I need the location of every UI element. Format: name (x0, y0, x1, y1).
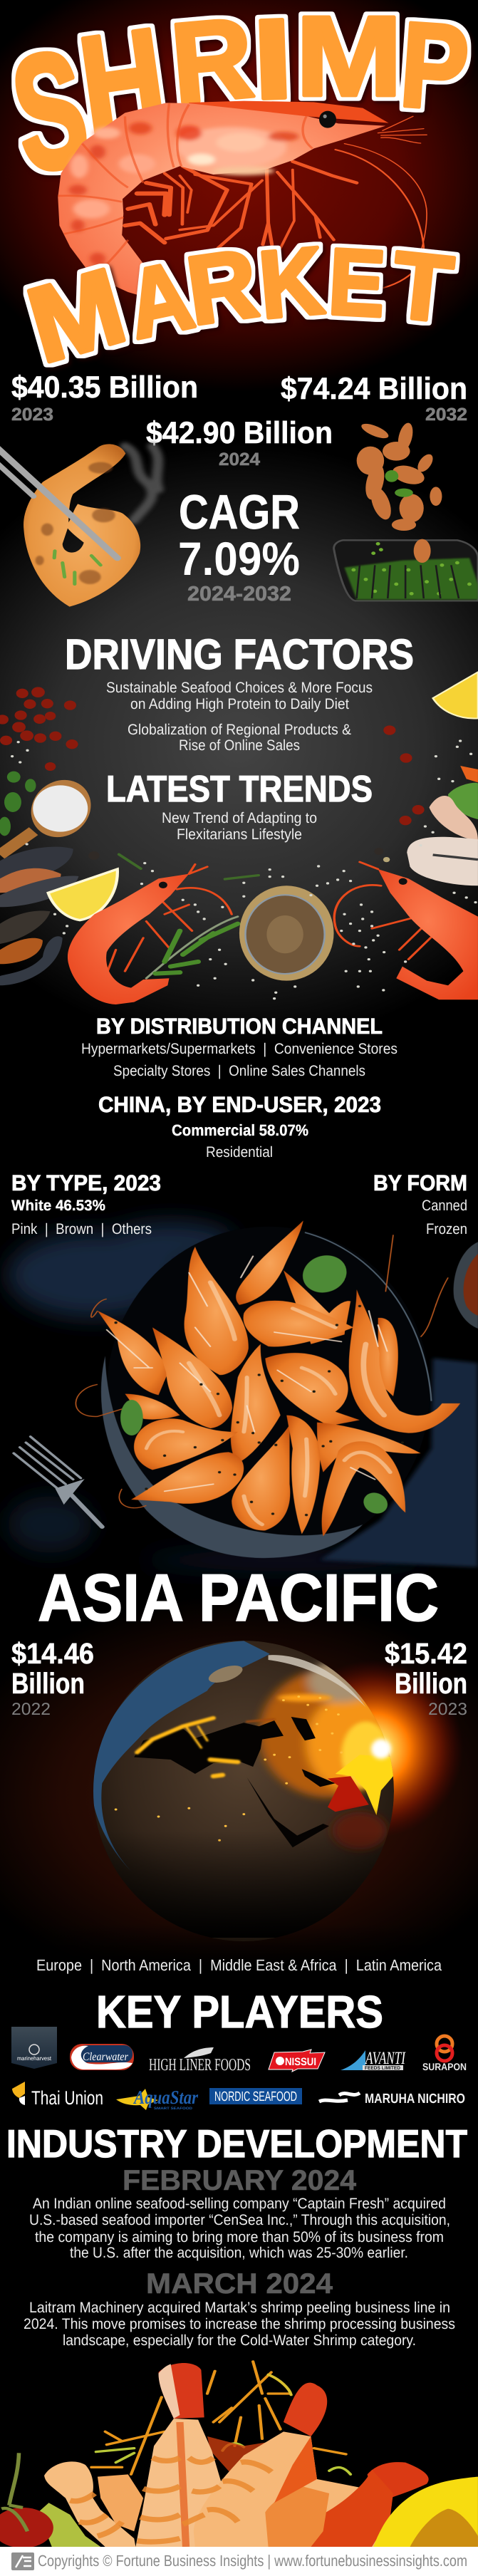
panel: type and form segments (11, 1170, 467, 1237)
char marks (36, 462, 115, 584)
CAGR: 2024-2032 (187, 583, 291, 606)
panel: key players (11, 1986, 467, 2111)
shrimp legs and antennae (125, 116, 427, 294)
India (336, 1755, 395, 1815)
logo: Nordic Seafood (209, 2088, 302, 2104)
by form segment (373, 1170, 467, 1237)
sun flare (371, 1739, 391, 1759)
shrimp body (58, 103, 385, 311)
title word MARKET: T (388, 232, 457, 343)
text: driving factors list: on Adding High Protein to Daily Diet (130, 696, 349, 712)
right shrimp (334, 862, 478, 999)
stat: 2023 value: $15.42 (385, 1637, 467, 1670)
panel: industry development (6, 2121, 467, 2349)
glow background (0, 1596, 478, 1995)
logo: marine harvest: marineharvest (17, 2055, 52, 2062)
panel: photo plate of prawns (7, 1220, 478, 1572)
photo: falling shrimp and grill pan (334, 421, 478, 601)
heading: key players: KEY PLAYERS (96, 1986, 383, 2037)
CAGR (178, 485, 300, 606)
land sparkle (116, 1697, 341, 1840)
heading: China by end-user: CHINA, BY END-USER, 2023 (98, 1092, 381, 1117)
small spice bowl (454, 1242, 478, 1329)
fork (14, 1437, 102, 1527)
logo: Fortune Business Insights (11, 2552, 34, 2570)
rosemary (146, 917, 238, 978)
subheading: February 2024: FEBRUARY 2024 (123, 2165, 357, 2196)
logo: High Liner Foods: HIGH LINER FOODS (149, 2056, 251, 2074)
text: latest trends list: New Trend of Adapting to (162, 810, 317, 826)
by type segment: White 46.53% (11, 1198, 105, 1214)
green onion (54, 551, 100, 584)
heading: Asia Pacific: ASIA PACIFIC (38, 1560, 439, 1635)
stat: 2024 value: 2024 (219, 450, 260, 469)
left shrimp (68, 864, 232, 1004)
prawns (98, 1220, 460, 1537)
globe base shadow (108, 1839, 378, 1938)
shrimp bodies (44, 2461, 135, 2547)
stat: 2032 value (281, 372, 467, 425)
text: latest trends list: Flexitarians Lifestyle (177, 826, 302, 843)
wooden spoon with salt (0, 831, 33, 855)
prawn highlights (146, 1282, 390, 1525)
caviar (0, 687, 425, 825)
panel: seafood still life (0, 672, 478, 1004)
text: driving factors list: Sustainable Seafood Choices & More Focus (106, 680, 373, 696)
stat: 2023 value: 2023 (11, 405, 53, 425)
prawn leg streaks (107, 1256, 387, 1491)
text: February development: An Indian online seafood-selling company “Captain Fresh” acquired (33, 2196, 446, 2212)
logo: Avanti Feeds (341, 2049, 406, 2071)
text: driving factors list: Globalization of Regional Products & (128, 722, 351, 738)
bowl of sauce (239, 886, 334, 981)
heading: by distribution channel: BY DISTRIBUTION CHANNEL (96, 1014, 383, 1039)
text: distribution channels: Specialty Stores | Online Sales Channels (113, 1063, 365, 1079)
heading: latest trends: LATEST TRENDS (106, 769, 373, 810)
panel: market size and CAGR (0, 370, 478, 1047)
chopsticks (0, 447, 118, 558)
by type segment (11, 1170, 161, 1237)
salad left (38, 2503, 100, 2547)
shrimp rostrum spikes (189, 101, 389, 123)
logo: Clearwater (70, 2044, 134, 2070)
falling shrimp pieces (357, 421, 442, 563)
text: February development: the U.S. after the acquisition, which was 25-30% earlier. (70, 2245, 408, 2261)
illustration: main shrimp (58, 101, 427, 311)
logo: Maruha Nichiro (319, 2092, 465, 2107)
logo: Surapon (422, 2036, 467, 2072)
title word MARKET: R (181, 229, 264, 346)
by form segment: Frozen (426, 1221, 467, 1237)
antennae (76, 1235, 448, 1508)
logo: Surapon: SURAPON (422, 2061, 467, 2072)
text: March development: Laitram Machinery acquired Martak’s shrimp peeling business line in (29, 2300, 450, 2316)
footer (0, 2547, 478, 2576)
shrimp eye (319, 111, 336, 128)
lemon wedge (48, 869, 118, 920)
logo: Clearwater: Clearwater (83, 2051, 129, 2063)
city lights (137, 1718, 274, 1776)
title word MARKET (16, 227, 457, 386)
steam (125, 447, 159, 520)
stat: 2023 value: 2023 (428, 1700, 467, 1719)
back shrimp tails (159, 2363, 204, 2419)
text: February development: the company is aiming to bring more than 50% of its business from (35, 2229, 444, 2245)
lower red glow (332, 1812, 387, 1850)
globe (85, 1641, 406, 1941)
logo: Thai Union (12, 2082, 103, 2109)
logo: AquaStar: SMART SEAFOOD (154, 2107, 192, 2111)
plate rim crescent (101, 1356, 363, 1558)
polar highlight (269, 1655, 365, 1708)
text: driving factors list (106, 680, 373, 754)
CAGR: 7.09% (178, 532, 300, 585)
ocean blue limb (91, 1641, 270, 1871)
herbs in pan (345, 558, 478, 600)
basil leaves (120, 1250, 392, 1517)
title word MARKET: M (16, 246, 137, 386)
stat: 2022 value: Billion (11, 1667, 85, 1700)
slate lower right (320, 1359, 478, 1567)
shrimp body shading (68, 122, 298, 265)
logo: marine harvest (11, 2027, 57, 2069)
title word SHRIMP: P (396, 0, 473, 137)
stat: 2032 value: 2032 (425, 405, 467, 425)
by form segment: Canned (422, 1198, 467, 1214)
logo: Thai Union: Thai Union (31, 2087, 103, 2109)
sea salt scatter (12, 741, 476, 999)
logo: AquaStar (116, 2087, 198, 2111)
text: driving factors list: Rise of Online Sales (179, 737, 300, 754)
shrimp shell segment lines (58, 103, 313, 276)
photo: shrimp plate footer image (0, 2362, 478, 2548)
title word SHRIMP: H (71, 0, 175, 165)
photo: grilled shrimp on chopsticks (0, 444, 159, 607)
sun flare glow (285, 1660, 463, 1838)
text: February development (29, 2196, 450, 2261)
basil sprig (0, 772, 36, 836)
dark sea shapes (134, 1717, 336, 1847)
logo: Nissui: NISSUI (285, 2056, 316, 2068)
stat: 2023 value (385, 1637, 467, 1719)
pan (334, 540, 478, 601)
text: end users: Commercial 58.07% (172, 1121, 308, 1139)
text: distribution channels (81, 1041, 398, 1079)
shredded vegetables (91, 2362, 346, 2474)
text: end users (172, 1121, 308, 1160)
plate (107, 1227, 430, 1557)
text: March development: 2024. This move promises to increase the shrimp processing business (24, 2316, 455, 2332)
stat: 2032 value: $74.24 Billion (281, 372, 467, 406)
title word MARKET: A (118, 241, 202, 360)
text: distribution channels: Hypermarkets/Supermarkets | Convenience Stores (81, 1041, 398, 1057)
title word MARKET: E (326, 229, 388, 337)
text: March development (24, 2300, 455, 2349)
stat: 2023 value: $40.35 Billion (11, 370, 198, 405)
stat: 2023 value (11, 370, 198, 425)
text: March development: landscape, especially for the Cold-Water Shrimp category. (63, 2332, 416, 2349)
text: other regions: Europe | North America | Middle East & Africa | Latin America (36, 1956, 442, 1974)
title word SHRIMP: S (0, 16, 100, 209)
subheading: March 2024: MARCH 2024 (146, 2268, 333, 2300)
logo: Avanti Feeds: AVANTI (365, 2049, 406, 2068)
panel: distribution and end-user segments (81, 1014, 398, 1160)
lemon slice (373, 2477, 478, 2547)
heading: driving factors: DRIVING FACTORS (65, 630, 414, 678)
text: end users: Residential (206, 1144, 273, 1160)
logo: Nordic Seafood: NORDIC SEAFOOD (214, 2089, 297, 2104)
text: latest trends list (162, 810, 317, 843)
herb specks (116, 1306, 402, 1515)
peppercorns (88, 851, 99, 860)
slate background (7, 1222, 427, 1572)
title word MARKET: K (255, 227, 328, 339)
tomato (0, 2508, 53, 2548)
stat: 2022 value (11, 1637, 94, 1719)
title word SHRIMP (0, 0, 473, 209)
by form segment: BY FORM (373, 1170, 467, 1195)
panel: hero title (0, 0, 478, 392)
grilled shrimp (24, 444, 140, 607)
squid ring and shrimp pieces (460, 766, 478, 782)
logo: Nissui (269, 2050, 325, 2072)
by type segment: Pink | Brown | Others (11, 1221, 152, 1237)
stat: 2024 value (146, 416, 333, 469)
logo: Avanti Feeds: FEEDS LIMITED (365, 2066, 400, 2071)
warm land glow (259, 1660, 400, 1797)
logo: AquaStar: AquaStar (133, 2087, 198, 2108)
shrimp segment bands (70, 2458, 271, 2542)
logo: High Liner Foods (149, 2047, 251, 2074)
mussels (0, 847, 73, 883)
by type segment: BY TYPE, 2023 (11, 1170, 161, 1195)
stat: 2024 value: $42.90 Billion (146, 416, 333, 450)
panel: Asia Pacific globe (0, 1560, 478, 1995)
stat: 2022 value: 2022 (11, 1700, 51, 1719)
lemon top right (433, 672, 478, 719)
CAGR: CAGR (179, 485, 300, 539)
stat: 2022 value: $14.46 (11, 1637, 94, 1670)
text: February development: U.S.-based seafood importer “CenSea Inc.,” Through this acquisition, (29, 2212, 450, 2228)
